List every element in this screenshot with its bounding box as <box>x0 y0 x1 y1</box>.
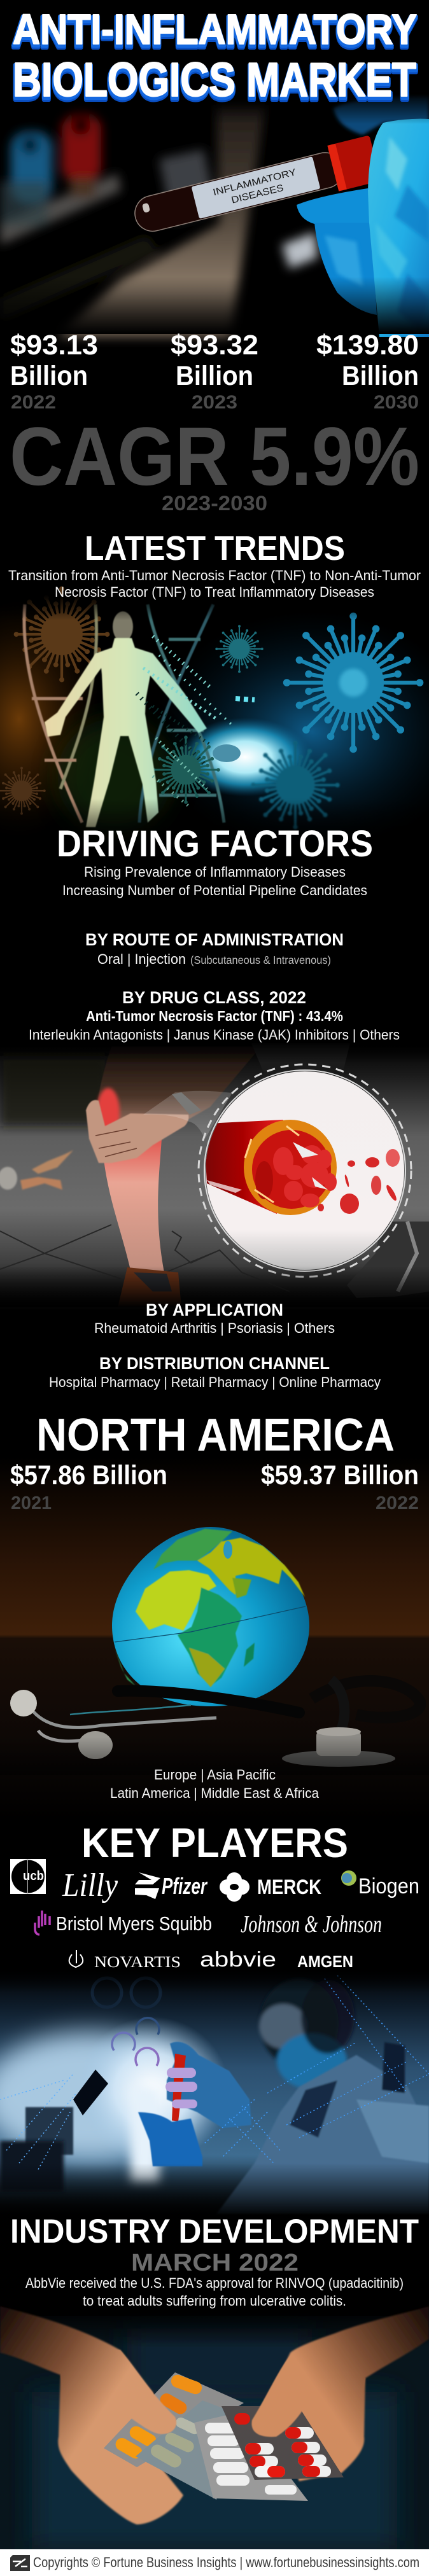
pavement <box>0 1043 429 1311</box>
section fades <box>0 2163 429 2217</box>
north america 2022 value <box>261 1460 419 1514</box>
distant teal virus <box>216 626 262 672</box>
other regions list: Latin America | Middle East & Africa <box>110 1785 320 1801</box>
right thumb <box>251 2353 365 2437</box>
hands on knee <box>86 1100 188 1163</box>
large blue virus <box>287 616 420 749</box>
DNA helix left <box>24 604 97 823</box>
vessel cross-section <box>244 1120 337 1215</box>
lilac finger highlights <box>165 2068 197 2108</box>
blister: clear capsules <box>136 2400 246 2500</box>
floating blood cells <box>318 1149 400 1214</box>
holographic dials <box>92 1978 160 2007</box>
blister: white capsules <box>194 2412 308 2501</box>
background glows <box>0 598 102 840</box>
scientist coat <box>216 2042 429 2214</box>
scientist head <box>259 1979 355 2089</box>
heading: driving factors: DRIVING FACTORS <box>57 823 373 865</box>
right hand <box>267 2306 429 2481</box>
segment: route of administration <box>85 930 344 967</box>
segment: route of administration: Oral | Injection <box>97 951 186 967</box>
CAGR period: 2023-2030 <box>162 492 267 515</box>
stat: 2022 value <box>10 330 98 413</box>
segment: drug class: BY DRUG CLASS, 2022 <box>122 988 306 1007</box>
gloved upper hand <box>167 2042 251 2128</box>
logo: Bristol Myers Squibb: Bristol Myers Squibb <box>56 1912 212 1935</box>
logo: AbbVie: abbvie <box>200 1947 276 1971</box>
logo: Pfizer <box>135 1872 207 1899</box>
section fades <box>0 595 429 620</box>
company logos <box>10 1859 419 1971</box>
segment: distribution channel: BY DISTRIBUTION CHANNEL <box>99 1354 330 1373</box>
photo fade edges <box>0 92 429 124</box>
segment: distribution channel: Hospital Pharmacy | Retail Pharmacy | Online Pharmacy <box>49 1374 381 1390</box>
gauges <box>112 2018 159 2066</box>
blister: red and white capsules <box>222 2406 344 2480</box>
segment: application: Rheumatoid Arthritis | Psoriasis | Others <box>94 1320 335 1336</box>
top fade <box>0 2309 429 2348</box>
stat: 2022 value: 2022 <box>11 392 56 413</box>
dissolving particles <box>137 636 255 808</box>
segment: drug class: Interleukin Antagonists | Janus Kinase (JAK) Inhibitors | Others <box>29 1027 400 1043</box>
segment: drug class: Anti-Tumor Necrosis Factor (TNF) : 43.4% <box>86 1008 343 1024</box>
illustration: human body, DNA and viruses <box>0 589 429 853</box>
photo: blood test tube in gloved hand <box>0 92 429 337</box>
dark device <box>73 2070 108 2115</box>
segment: route of administration: (Subcutaneous & Intravenous) <box>190 954 331 966</box>
development description: to treat adults suffering from ulcerative colitis. <box>83 2293 346 2309</box>
stat: 2022 value: $93.13 <box>10 330 98 361</box>
stat: 2023 value <box>171 330 258 413</box>
logo: Merck <box>220 1872 321 1902</box>
development date: MARCH 2022 <box>131 2250 299 2276</box>
stat: 2030 value: 2030 <box>374 392 419 413</box>
inset circle <box>199 1064 411 1277</box>
section fades <box>0 1266 429 1307</box>
blister: orange capsules <box>104 2372 244 2467</box>
second person foot <box>347 1222 429 1298</box>
stethoscope tubing at rear <box>312 1681 420 1718</box>
chest piece <box>282 1750 395 1767</box>
tube cap <box>327 135 381 191</box>
label text: INFLAMMATORY <box>212 167 297 198</box>
stat: 2022 value: Billion <box>10 361 88 391</box>
blood vessel <box>204 1120 283 1214</box>
north america 2021 value <box>10 1460 167 1514</box>
lower blue virus <box>253 743 337 827</box>
logo: Biogen: Biogen <box>358 1874 419 1898</box>
red blood cells in vessel <box>273 1145 337 1208</box>
ground debris <box>0 1150 73 1190</box>
north america 2021 value: 2021 <box>11 1493 52 1514</box>
illustration: scientist with blood sample <box>0 1967 429 2217</box>
other regions list: Europe | Asia Pacific <box>154 1767 276 1783</box>
title <box>12 6 417 110</box>
illustration: globe and stethoscope <box>0 1457 429 1820</box>
globe <box>112 1527 309 1706</box>
central dark virus <box>153 737 218 802</box>
red knee highlight <box>97 1088 120 1136</box>
stat: 2023 value: $93.32 <box>171 330 258 361</box>
logo: Pfizer: Pfizer <box>162 1873 207 1899</box>
segment: drug class <box>29 988 400 1043</box>
shoe <box>118 1267 181 1307</box>
DNA helix right <box>139 604 224 823</box>
glass lens wedge <box>143 1091 232 1139</box>
north america heading: NORTH AMERICA <box>36 1410 395 1461</box>
small capsule <box>213 744 241 762</box>
north america 2022 value: 2022 <box>376 1493 419 1514</box>
logo: Novartis <box>69 1950 181 1971</box>
lower leg <box>102 1139 167 1285</box>
logo: Amgen: AMGEN <box>297 1952 353 1971</box>
north america 2021 value: $57.86 Billion <box>10 1460 167 1491</box>
human figure <box>45 611 207 827</box>
logo: Lilly: Lilly <box>62 1867 118 1904</box>
logo: ucb: ucb <box>23 1869 44 1883</box>
logo: ucb <box>10 1859 46 1894</box>
footer bar <box>0 2549 429 2576</box>
stat: 2030 value: $139.80 <box>316 330 419 361</box>
thigh <box>95 1047 261 1129</box>
left hand <box>0 2306 183 2524</box>
test tube <box>130 135 381 240</box>
stethoscope <box>10 1690 395 1767</box>
development description <box>25 2275 404 2309</box>
driving factors list: Rising Prevalence of Inflammatory Diseases <box>84 864 346 880</box>
segment: route of administration: BY ROUTE OF ADMINISTRATION <box>85 930 344 949</box>
segment: distribution channel <box>49 1354 381 1390</box>
gloved lower hand <box>138 2112 202 2166</box>
digital mesh <box>0 1975 429 2169</box>
illustration: hands holding pill blisters <box>0 2306 429 2549</box>
logo: Biogen <box>341 1870 419 1898</box>
heading: latest trends: LATEST TRENDS <box>85 529 345 567</box>
segment: application: BY APPLICATION <box>146 1300 283 1319</box>
driving factors list <box>62 864 367 898</box>
section bottom fade <box>0 1737 429 1775</box>
latest trends description: Necrosis Factor (TNF) to Treat Inflammatory Diseases <box>55 584 374 600</box>
test tube: DISEASES <box>230 183 285 206</box>
footer logo <box>10 2555 30 2571</box>
latest trends description: Transition from Anti-Tumor Necrosis Factor (TNF) to Non-Anti-Tumor <box>8 567 421 583</box>
tube label <box>192 157 320 219</box>
left thumb <box>60 2350 176 2434</box>
lab backdrop <box>0 1969 429 2217</box>
dark clothing backdrop <box>0 2316 429 2549</box>
logo: Merck: MERCK <box>257 1876 321 1898</box>
stat: 2030 value <box>316 330 419 413</box>
wristband <box>172 1092 201 1115</box>
stat: 2023 value: 2023 <box>192 392 237 413</box>
logo: Novartis: NOVARTIS <box>94 1954 181 1971</box>
illustration: knee pain with blood vessel inset <box>0 1041 429 1311</box>
stat: 2023 value: Billion <box>176 361 253 391</box>
wood backdrop <box>0 1457 429 1820</box>
segment: application <box>94 1300 335 1336</box>
blue glove <box>297 119 429 337</box>
logo: Johnson & Johnson: Johnson & Johnson <box>241 1911 382 1938</box>
shorts <box>251 1043 350 1082</box>
other regions list <box>110 1767 320 1801</box>
latest trends description <box>8 567 421 600</box>
gloved fingers behind tube <box>334 95 429 135</box>
stat: 2030 value: Billion <box>342 361 419 391</box>
heading: key players: KEY PLAYERS <box>81 1820 348 1866</box>
driving factors list: Increasing Number of Potential Pipeline Candidates <box>62 882 367 898</box>
blurred laboratory background <box>0 105 318 337</box>
blood sample tube <box>172 2054 186 2122</box>
brown viruses <box>17 589 108 679</box>
